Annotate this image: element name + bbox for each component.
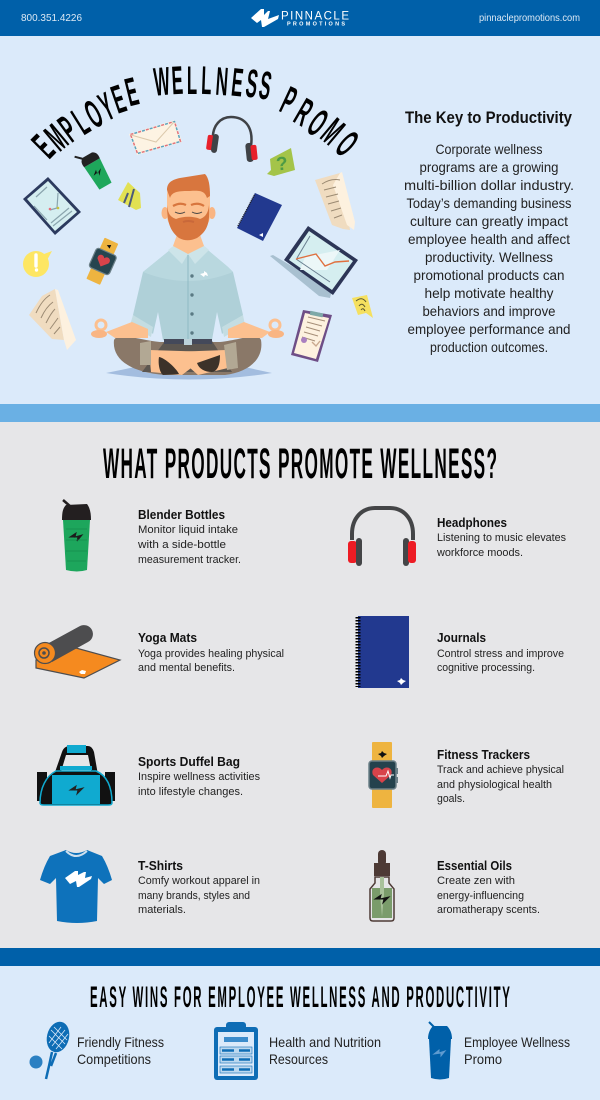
hero curved title: Y xyxy=(93,85,121,130)
hero intro paragraph: culture can greatly impact xyxy=(410,213,568,229)
hero curved title: O xyxy=(327,123,366,165)
item: fitness trackers: goals. xyxy=(437,793,465,805)
item: sports duffel bag: Sports Duffel Bag xyxy=(138,755,240,769)
win: wellness promo: Employee Wellness xyxy=(464,1034,570,1050)
item: journals xyxy=(358,616,564,688)
hero intro paragraph: behaviors and improve xyxy=(422,303,556,319)
panel: products xyxy=(0,422,600,948)
logo: Pinnacle Promotions: PROMOTIONS xyxy=(287,22,345,28)
hero curved title: S xyxy=(256,63,275,109)
item: t-shirts: T-Shirts xyxy=(138,859,183,873)
phone number: 800.351.4226 xyxy=(21,12,82,24)
hero curved title: L xyxy=(65,100,97,143)
item: t-shirts: Comfy workout apparel in xyxy=(138,875,260,887)
win: health resources: Resources xyxy=(269,1051,328,1067)
illustration: meditating man xyxy=(91,174,284,380)
hero curved title xyxy=(24,59,366,166)
item: essential oils: Create zen with xyxy=(437,875,515,887)
icon: essential oil bottle xyxy=(370,850,394,921)
icon: tablet left xyxy=(23,177,81,235)
icon: yoga mat xyxy=(34,625,120,678)
icon: fitness tracker xyxy=(369,742,398,808)
item: blender bottles: with a side-bottle xyxy=(137,539,226,551)
icon: blue bottle xyxy=(428,1022,452,1080)
icon: clipboard xyxy=(214,1022,258,1080)
panel: easy wins xyxy=(0,966,600,1100)
win: health resources xyxy=(214,1022,381,1080)
win: fitness competitions xyxy=(30,1019,164,1079)
win: health resources: Health and Nutrition xyxy=(269,1034,381,1050)
hero intro paragraph: employee performance and xyxy=(408,321,570,337)
icon: tennis racket and ball xyxy=(30,1019,72,1079)
products heading: WHAT PRODUCTS PROMOTE WELLNESS? xyxy=(103,439,497,487)
icon: exclamation bubble xyxy=(23,251,52,277)
hero curved title: E xyxy=(24,127,63,166)
item: yoga mats: Yoga provides healing physical xyxy=(138,648,284,660)
item: sports duffel bag xyxy=(37,745,260,805)
hero curved title: P xyxy=(51,108,86,151)
item: blender bottles: measurement tracker. xyxy=(138,554,241,566)
hero curved title: E xyxy=(106,77,131,122)
hero intro paragraph: programs are a growing xyxy=(420,159,558,175)
item: journals: Control stress and improve xyxy=(437,648,564,660)
hero intro paragraph: help motivate healthy xyxy=(424,285,554,301)
item: sports duffel bag: into lifestyle changes. xyxy=(138,786,243,798)
hero intro paragraph: production outcomes. xyxy=(430,339,548,355)
icon: question bubble: ? xyxy=(275,154,289,175)
logo: Pinnacle Promotions: PINNACLE xyxy=(281,10,349,22)
neck and head xyxy=(162,174,216,254)
hero curved title: O xyxy=(78,92,110,137)
win: wellness promo: Promo xyxy=(464,1051,502,1067)
item: essential oils: Essential Oils xyxy=(437,859,512,873)
logo: Pinnacle Promotions xyxy=(251,9,349,28)
panel: header bar xyxy=(0,0,600,36)
item: blender bottles: Monitor liquid intake xyxy=(138,524,238,536)
icon: duffel bag xyxy=(37,745,115,805)
hero curved title: N xyxy=(214,59,230,105)
icon: t-shirt xyxy=(40,850,112,923)
item: headphones: Listening to music elevates xyxy=(437,532,566,544)
hero curved title: E xyxy=(229,60,245,106)
icon: headphones xyxy=(348,508,416,566)
hero subheading: The Key to Productivity xyxy=(405,109,573,127)
item: sports duffel bag: Inspire wellness activities xyxy=(138,771,260,783)
easy wins heading: EASY WINS FOR EMPLOYEE WELLNESS AND PRODUCTIVITY xyxy=(90,979,510,1014)
item: journals: Journals xyxy=(437,631,486,645)
icon: scribble note xyxy=(352,295,373,318)
floor shadow xyxy=(106,366,272,380)
icon: green bottle xyxy=(75,146,114,192)
item: blender bottles xyxy=(62,500,241,572)
crossed legs xyxy=(114,337,261,375)
hero curved title: L xyxy=(187,59,197,103)
item: essential oils xyxy=(370,850,540,921)
item: yoga mats: and mental benefits. xyxy=(138,662,235,674)
win: wellness promo xyxy=(428,1022,570,1080)
item: essential oils: aromatherapy scents. xyxy=(437,904,540,916)
item: essential oils: energy-influencing xyxy=(437,890,524,902)
hero intro paragraph xyxy=(404,141,574,355)
hero curved title: W xyxy=(152,59,172,105)
shirt xyxy=(130,244,245,340)
item: t-shirts: materials. xyxy=(138,904,186,916)
website: pinnaclepromotions.com xyxy=(479,12,580,24)
win: fitness competitions: Competitions xyxy=(77,1051,151,1067)
hero curved title: L xyxy=(201,59,212,103)
belt xyxy=(164,339,212,345)
hero curved title: P xyxy=(274,79,303,124)
item: t-shirts: many brands, styles and xyxy=(138,890,250,902)
icon: hero notebook xyxy=(237,193,282,241)
hero curved title: M xyxy=(313,111,352,153)
icon: blender bottle xyxy=(62,500,91,572)
item: headphones: workforce moods. xyxy=(436,547,523,559)
icon: curled paper left xyxy=(29,289,76,350)
icon: laptop xyxy=(270,226,358,298)
icon: yellow note xyxy=(118,182,141,210)
hero intro paragraph: Today’s demanding business xyxy=(406,195,572,211)
icon: journal xyxy=(358,616,409,688)
item: journals: cognitive processing. xyxy=(437,662,535,674)
item: fitness trackers: and physiological health xyxy=(437,779,552,791)
icon: curled paper right xyxy=(315,172,355,230)
item: t-shirts xyxy=(40,850,260,923)
icon: envelope xyxy=(129,120,182,155)
hero curved title: O xyxy=(299,101,336,145)
icon: smart watch xyxy=(84,236,122,286)
arms and hands xyxy=(91,320,284,338)
hero intro paragraph: promotional products can xyxy=(414,267,564,283)
hero curved title: S xyxy=(243,61,260,107)
item: yoga mats xyxy=(34,625,284,678)
item: fitness trackers: Track and achieve physical xyxy=(437,764,564,776)
icon: headphones small xyxy=(206,117,258,162)
item: blender bottles: Blender Bottles xyxy=(138,508,225,522)
panel: hero xyxy=(0,36,600,404)
hero intro paragraph: employee health and affect xyxy=(408,231,570,247)
item: headphones: Headphones xyxy=(437,516,507,530)
icon: question bubble xyxy=(267,148,295,176)
win: fitness competitions: Friendly Fitness xyxy=(77,1034,164,1050)
item: yoga mats: Yoga Mats xyxy=(138,631,197,645)
hero intro paragraph: multi-billion dollar industry. xyxy=(404,177,574,193)
item: fitness trackers xyxy=(369,742,564,808)
icon: clipboard purple xyxy=(291,310,332,362)
item: fitness trackers: Fitness Trackers xyxy=(437,748,530,762)
hero curved title: E xyxy=(171,59,184,103)
hero curved title: R xyxy=(287,90,320,135)
hero intro paragraph: productivity. Wellness xyxy=(425,249,553,265)
hero intro paragraph: Corporate wellness xyxy=(436,141,542,157)
hero curved title: E xyxy=(121,69,143,115)
hero curved title: M xyxy=(37,117,76,159)
item: headphones xyxy=(348,508,566,566)
